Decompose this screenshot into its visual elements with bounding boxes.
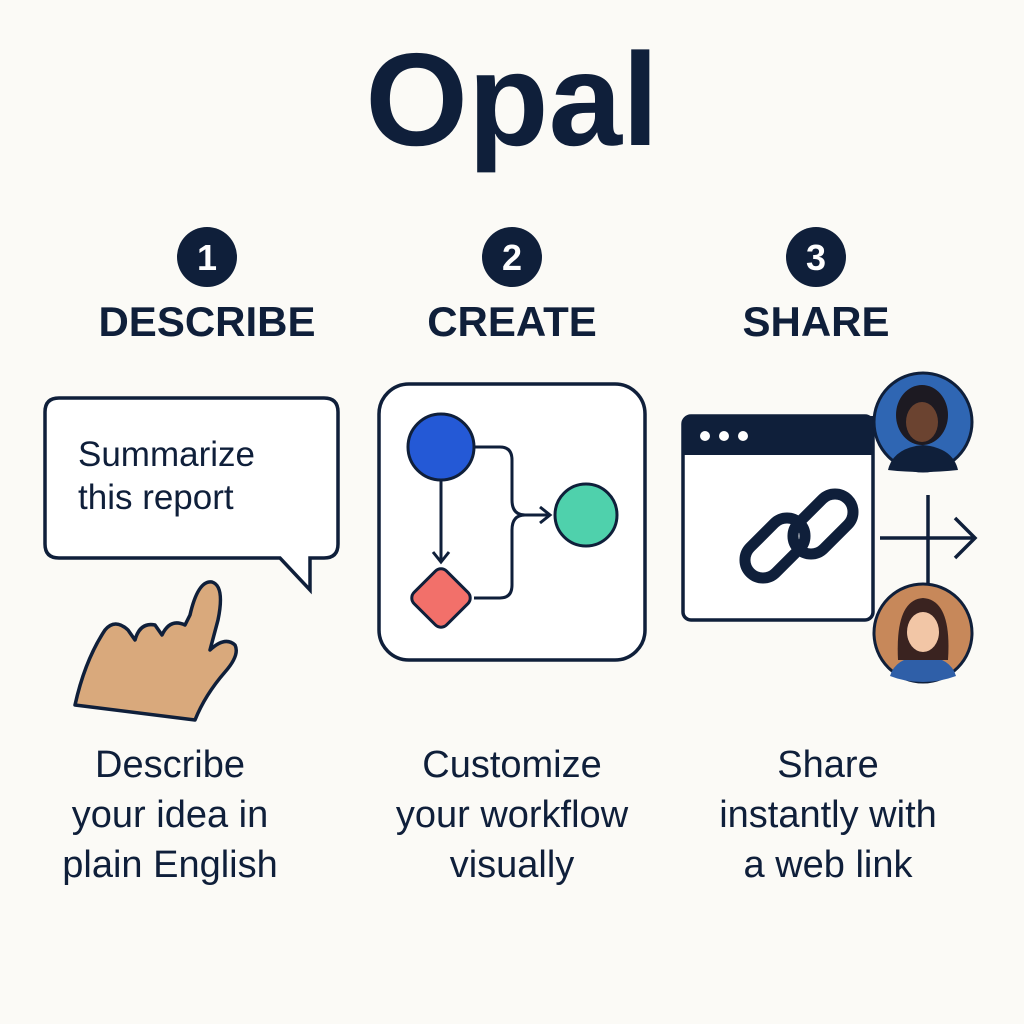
caption: share: instantly with — [719, 794, 937, 836]
speech bubble — [45, 398, 338, 590]
caption: describe: your idea in — [72, 794, 268, 836]
caption: share: a web link — [744, 844, 912, 886]
caption: create: your workflow — [396, 794, 628, 836]
caption: create: Customize — [422, 744, 602, 786]
browser window with link — [683, 416, 873, 620]
caption: describe: plain English — [62, 844, 278, 886]
caption: share — [719, 744, 937, 886]
caption: create — [396, 744, 628, 886]
icon: hand — [75, 582, 236, 720]
caption: describe: Describe — [95, 744, 245, 786]
avatar 1 — [874, 373, 972, 472]
flow diagram panel — [379, 384, 645, 660]
title: Opal — [365, 26, 659, 173]
step labels: DESCRIBE — [98, 298, 316, 345]
avatar 2 — [874, 584, 972, 682]
speech bubble: this report — [78, 478, 234, 517]
text: SHARE — [742, 298, 890, 345]
speech bubble: Summarize — [78, 435, 255, 474]
caption: create: visually — [450, 844, 574, 886]
number badges: 1 — [197, 237, 217, 278]
number badges: 2 — [502, 237, 522, 278]
caption: describe — [62, 744, 278, 886]
arrow — [880, 495, 975, 585]
text: CREATE — [427, 298, 597, 345]
number badges — [177, 227, 846, 287]
number badges: 3 — [806, 237, 826, 278]
caption: share: Share — [777, 744, 879, 786]
